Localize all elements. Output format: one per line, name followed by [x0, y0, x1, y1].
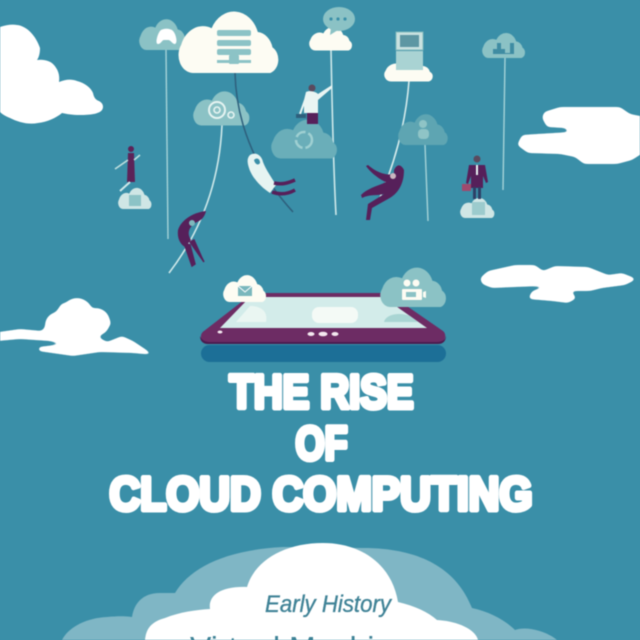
cloud: mid left white: [0, 298, 154, 356]
figure: man standing on sync cloud: [296, 84, 332, 124]
figure: man hanging in white shirt: [248, 154, 295, 194]
rope: game controller cloud: [166, 50, 168, 239]
title line 1: THE RISE: [230, 365, 414, 418]
figure: man swinging right: [361, 165, 404, 220]
tablet: [200, 293, 446, 344]
title: [110, 365, 532, 520]
text: Early History: Early History: [265, 591, 393, 618]
cloud icon: chat: [309, 7, 355, 50]
bottom cloud: front white layer: [145, 543, 478, 640]
cloud icon: laptop: [384, 32, 433, 82]
title line 2: OF: [296, 416, 348, 470]
cloud icon: sync: [271, 120, 337, 158]
cloud: mid right white: [480, 265, 637, 303]
cloud: right white: [517, 107, 640, 164]
cloud icon: game controller: [139, 19, 188, 50]
bottom cloud: back layer: [62, 547, 557, 640]
cloud icon: person: [398, 114, 448, 145]
rope: laptop cloud: [379, 81, 409, 200]
tablet shadow: [201, 345, 446, 362]
cloud icon: document left: [118, 188, 151, 209]
rope: server cloud: [235, 73, 293, 212]
figure: man climbing left: [178, 211, 206, 266]
rope: chat cloud: [331, 50, 336, 215]
cloud icon: video camera: [380, 268, 446, 307]
rope: person cloud: [425, 145, 428, 221]
rope: gear cloud: [169, 125, 222, 273]
tablet screen: [220, 297, 427, 328]
rope: eq cloud: [503, 58, 505, 190]
cloud: top left white: [0, 25, 103, 124]
cloud icon: document right: [460, 198, 494, 218]
cloud icon: server: [179, 11, 278, 73]
cloud icon: gear: [193, 91, 249, 126]
title line 3: CLOUD COMPUTING: [110, 467, 532, 520]
cloud icon: equalizer: [482, 33, 525, 58]
cloud icon: mail: [223, 275, 266, 302]
figure: businessman with briefcase: [462, 156, 488, 199]
figure: woman on small cloud: [115, 146, 140, 191]
tablet buttons: [218, 330, 338, 336]
